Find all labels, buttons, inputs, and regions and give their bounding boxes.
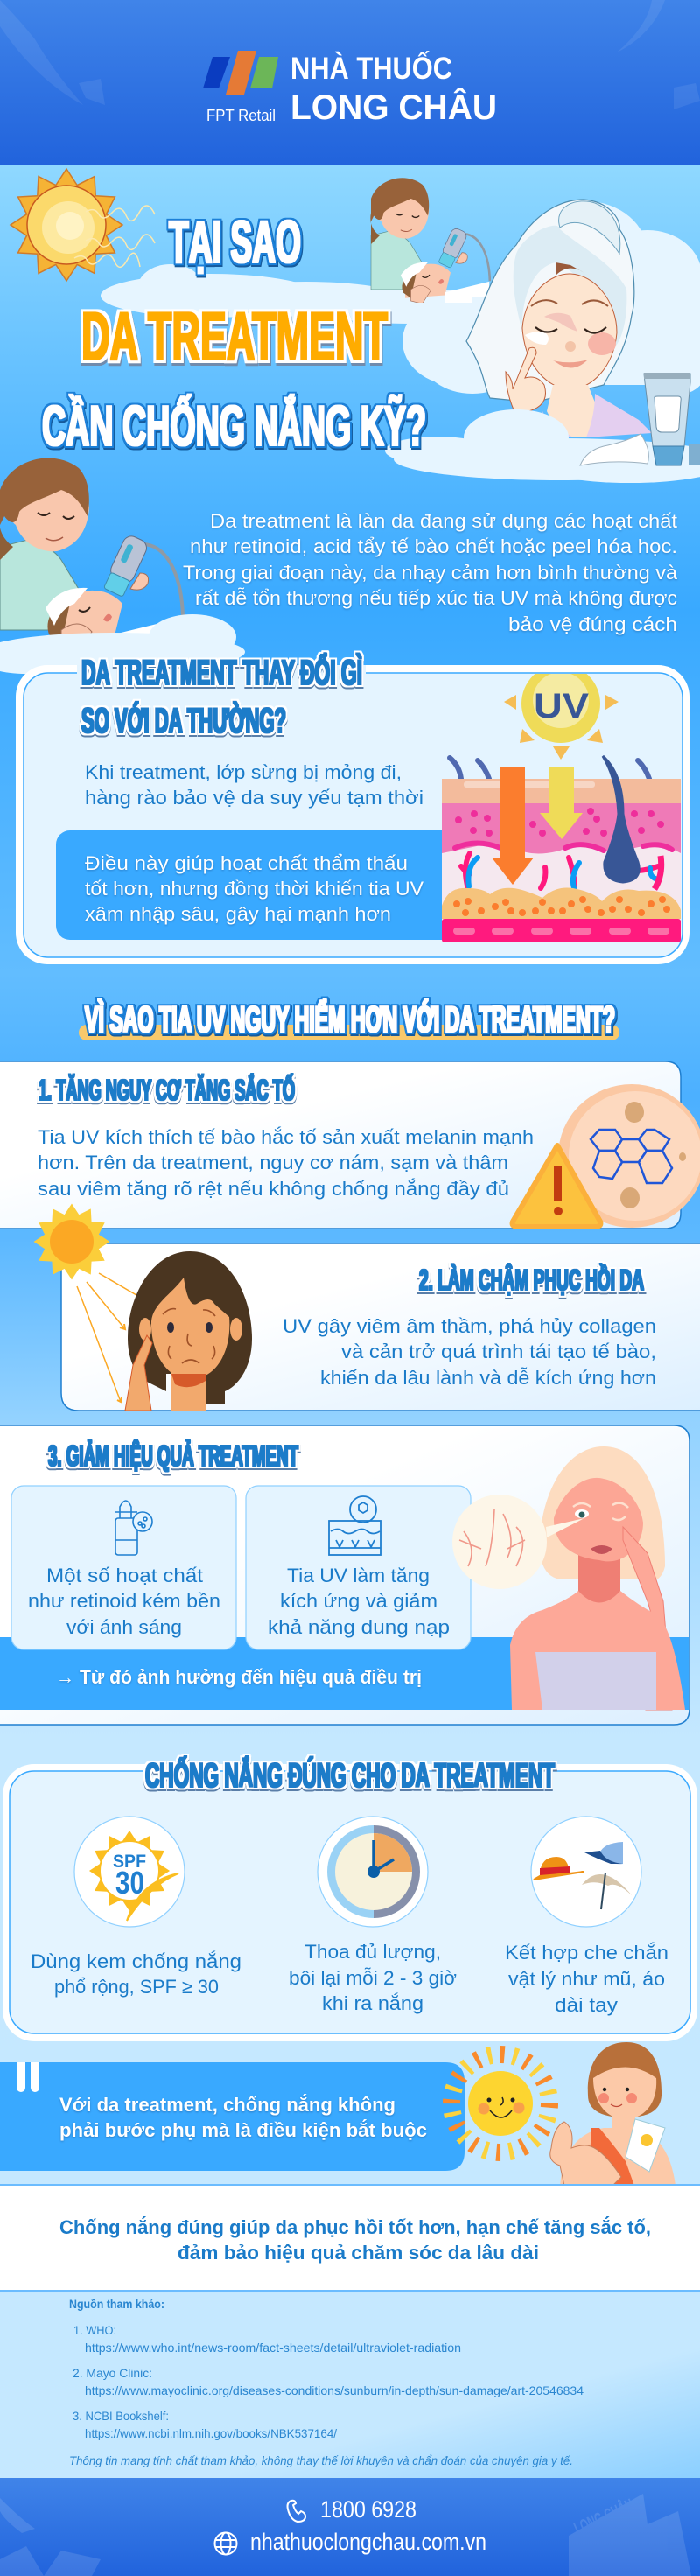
sub-card: irritation bbox=[246, 1486, 471, 1649]
illustration: nurse with device, large bbox=[0, 458, 183, 652]
intro paragraph: Da treatment là làn da đang sử dụng các hoạt chất bbox=[210, 510, 677, 532]
title: CẦN CHỐNG NẮNG KỸ? bbox=[42, 394, 426, 458]
panel: correct sun protection bbox=[3, 1755, 697, 2041]
callout: penetration: xâm nhập sâu, gây hại mạnh hơn bbox=[85, 903, 391, 925]
text: thinner barrier: hàng rào bảo vệ da suy yếu tạm thời bbox=[85, 787, 424, 808]
quote mark bbox=[17, 2062, 39, 2092]
box text: Tia UV làm tăng bbox=[287, 1564, 430, 1586]
footer band bbox=[0, 2478, 700, 2576]
callout text bbox=[60, 2094, 427, 2141]
icon: big sun bbox=[10, 169, 155, 281]
icon: smiling sun bbox=[452, 2054, 550, 2152]
cloud behind title bbox=[101, 264, 516, 385]
callout text: phải bước phụ mà là điều kiện bắt buộc bbox=[60, 2119, 427, 2141]
panel: da treatment thay doi gi bbox=[0, 651, 700, 2576]
box text: khả năng dung nạp bbox=[268, 1616, 450, 1638]
box text bbox=[28, 1564, 220, 1638]
page background bbox=[0, 165, 700, 2187]
illustration: woman applying sunscreen bbox=[550, 2042, 676, 2186]
card body: hơn. Trên da treatment, nguy cơ nám, sạm và thâm bbox=[38, 1152, 508, 1173]
title: TẠI SAO bbox=[169, 208, 301, 276]
icon: skin cell with melanin bbox=[558, 1084, 700, 1228]
card title: 3. GIẢM HIỆU QUẢ TREATMENT bbox=[48, 1439, 298, 1472]
text: thinner barrier: Khi treatment, lớp sừng bị mỏng đi, bbox=[85, 761, 402, 783]
step texts: phổ rộng, SPF ≥ 30 bbox=[54, 1976, 219, 1998]
references: 2. Mayo Clinic: bbox=[73, 2366, 152, 2380]
header band bbox=[0, 0, 700, 165]
band: conclusion bbox=[0, 2185, 700, 2291]
box text bbox=[268, 1564, 450, 1638]
references: Nguồn tham khảo: bbox=[69, 2297, 164, 2311]
panel heading: SO VỚI DA THƯỜNG? bbox=[81, 700, 286, 740]
illustration: woman with sun-damaged skin bbox=[452, 1446, 685, 1710]
footer watermark: storefront: LONG CHÂU bbox=[570, 2494, 637, 2539]
callout: sunscreen is mandatory bbox=[0, 2062, 465, 2171]
box text: Một số hoạt chất bbox=[46, 1564, 203, 1586]
intro paragraph: rất dễ tổn thương nếu tiếp xúc tia UV mà không được bbox=[195, 587, 677, 609]
band: conclusion: đảm bảo hiệu quả chăm sóc da lâu dài bbox=[178, 2242, 539, 2264]
brand name bbox=[290, 51, 497, 127]
card body: sau viêm tăng rõ rệt nếu không chống nắng đầy đủ bbox=[38, 1178, 509, 1200]
UV sun: UV bbox=[534, 687, 589, 725]
icon: hats and umbrella bbox=[531, 1816, 641, 1927]
card body: Tia UV kích thích tế bào hắc tố sản xuất melanin mạnh bbox=[38, 1126, 534, 1148]
intro paragraph: Trong giai đoạn này, da nhạy cảm hơn bình thường và bbox=[183, 562, 678, 584]
step texts: Dùng kem chống nắng bbox=[31, 1950, 242, 1972]
diagram: UV through skin layers bbox=[442, 664, 681, 942]
icon: SPF 30 sun: SPF bbox=[113, 1852, 146, 1872]
cloud under nurse bbox=[0, 614, 245, 674]
UV sun bbox=[504, 674, 619, 760]
text: thinner barrier bbox=[85, 761, 424, 808]
sub-card: retinoid bbox=[11, 1486, 236, 1649]
step texts: khi ra nắng bbox=[322, 1992, 424, 2014]
step texts: vật lý như mũ, áo bbox=[508, 1968, 665, 1990]
box text: với ánh sáng bbox=[66, 1616, 182, 1638]
intro paragraph: bảo vệ đúng cách bbox=[508, 613, 677, 635]
magnified skin cracks bbox=[452, 1494, 584, 1589]
illustration: woman in towel with sunscreen bbox=[420, 200, 700, 438]
icon: dropper bottle bbox=[116, 1501, 152, 1555]
intro paragraph: như retinoid, acid tẩy tế bào chết hoặc peel hóa học. bbox=[190, 536, 677, 557]
step texts: Thoa đủ lượng, bbox=[304, 1941, 441, 1963]
hair follicle bbox=[603, 756, 639, 882]
brand name: LONG CHÂU bbox=[290, 87, 497, 127]
cloud covering nurse base bbox=[332, 303, 499, 320]
icon: sunscreen tube and cream bbox=[580, 373, 700, 466]
callout text: Với da treatment, chống nắng không bbox=[60, 2094, 396, 2116]
callout: penetration: Điều này giúp hoạt chất thẩm thấu bbox=[85, 852, 408, 874]
panel heading: DA TREATMENT THAY ĐỔI GÌ bbox=[81, 651, 362, 692]
orange UV arrow bbox=[492, 767, 534, 885]
band text: → Từ đó ảnh hưởng đến hiệu quả điều trị bbox=[56, 1666, 422, 1688]
card 3: reduced treatment efficacy bbox=[0, 1425, 690, 1725]
icon: warning triangle bbox=[513, 1145, 600, 1227]
card body bbox=[283, 1315, 656, 1389]
references: https://www.who.int/news-room/fact-sheets/detail/ultraviolet-radiation bbox=[85, 2341, 461, 2355]
references bbox=[0, 2292, 700, 2478]
icon: small sun with rays bbox=[33, 1203, 158, 1402]
icon: SPF 30 sun: 30 bbox=[116, 1865, 144, 1900]
icon: clock bbox=[318, 1816, 428, 1927]
box text: kích ứng và giảm bbox=[280, 1590, 438, 1612]
illustration: nurse with device, small bbox=[370, 178, 490, 304]
callout: penetration: tốt hơn, nhưng đồng thời khiến tia UV bbox=[85, 878, 424, 900]
yellow UV arrow bbox=[540, 767, 583, 839]
references: 1. WHO: bbox=[74, 2323, 116, 2337]
website: nhathuoclongchau.com.vn bbox=[250, 2529, 486, 2555]
phone number: 1800 6928 bbox=[320, 2496, 416, 2523]
logo: FPT Retail bbox=[203, 51, 278, 124]
footer watermark: storefront bbox=[0, 2494, 691, 2576]
logo: FPT Retail: FPT Retail bbox=[206, 107, 276, 124]
illustration: woman with wrinkles bbox=[125, 1251, 252, 1410]
callout: penetration bbox=[56, 830, 458, 940]
card body bbox=[38, 1126, 534, 1200]
card title: 1. TĂNG NGUY CƠ TĂNG SẮC TỐ bbox=[38, 1073, 295, 1106]
cloud behind woman bbox=[420, 201, 700, 394]
card body: khiến da lâu lành và dễ kích ứng hơn bbox=[320, 1367, 656, 1389]
icon: SPF 30 sun bbox=[74, 1816, 185, 1927]
step texts: dài tay bbox=[555, 1994, 618, 2016]
title: DA TREATMENT bbox=[81, 298, 388, 374]
card 1: hyperpigmentation bbox=[0, 1061, 700, 1228]
step texts: Kết hợp che chắn bbox=[505, 1942, 668, 1964]
panel heading bbox=[81, 651, 362, 740]
references: https://www.ncbi.nlm.nih.gov/books/NBK537164/ bbox=[85, 2426, 337, 2440]
intro paragraph bbox=[183, 510, 678, 635]
title bbox=[42, 208, 426, 458]
references: 3. NCBI Bookshelf: bbox=[73, 2409, 169, 2423]
step texts: bôi lại mỗi 2 - 3 giờ bbox=[289, 1967, 457, 1989]
card body: UV gây viêm âm thầm, phá hủy collagen bbox=[283, 1315, 656, 1337]
card body: và cản trở quá trình tái tạo tế bào, bbox=[341, 1340, 656, 1362]
cloud under woman bbox=[385, 410, 700, 483]
references: https://www.mayoclinic.org/diseases-conditions/sunburn/in-depth/sun-damage/art-20546834 bbox=[85, 2384, 584, 2398]
band: conclusion: Chống nắng đúng giúp da phục hồi tốt hơn, hạn chế tăng sắc tố, bbox=[60, 2216, 651, 2238]
brand name: NHÀ THUỐC bbox=[290, 51, 452, 86]
phone number bbox=[287, 2496, 416, 2523]
box text: như retinoid kém bền bbox=[28, 1590, 220, 1612]
references: Thông tin mang tính chất tham khảo, không thay thế lời khuyên và chẩn đoán của chuyên gia y tế. bbox=[69, 2454, 573, 2468]
step texts bbox=[31, 1941, 668, 2016]
blue band bbox=[0, 1637, 689, 1710]
card 2: slow recovery bbox=[33, 1203, 700, 1410]
icon: skin with cells bbox=[329, 1496, 381, 1555]
